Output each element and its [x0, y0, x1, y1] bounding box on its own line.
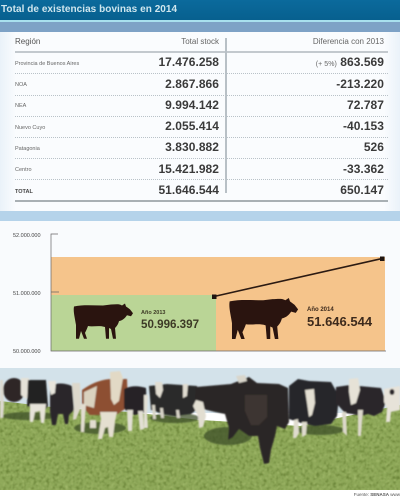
big dark cow centre [193, 375, 289, 464]
row: Provincia de Buenos Aires [15, 55, 384, 69]
row: NOA: 2.867.866 [165, 77, 219, 91]
title: Total de existencias bovinas en 2014 [1, 4, 177, 15]
axis labels: 51.000.000 [13, 291, 41, 297]
icon: cow 2014 [229, 298, 298, 339]
row: NOA [15, 77, 384, 91]
trend line [212, 256, 384, 299]
row: Nuevo Cuyo [15, 119, 384, 133]
row: NEA [15, 98, 384, 112]
chart [13, 233, 386, 355]
row: NEA: 9.994.142 [165, 98, 219, 112]
row: total: 650.147 [340, 183, 384, 197]
row: NOA: -213.220 [336, 77, 384, 91]
row: Patagonia: 526 [364, 140, 384, 154]
row: Nuevo Cuyo: Nuevo Cuyo [15, 125, 45, 131]
axis labels: 52.000.000 [13, 233, 41, 239]
panel: comparison chart [0, 221, 400, 368]
table header: Diferencia con 2013 [313, 37, 384, 46]
black cow centre-left [124, 386, 148, 431]
row: Patagonia: 3.830.882 [165, 140, 219, 154]
small herd centre-left [149, 382, 199, 419]
photo: herd of cows on pasture [0, 368, 400, 490]
table header: Total stock [181, 37, 219, 46]
row: NOA: NOA [15, 82, 27, 88]
decorative blue band [0, 211, 400, 221]
row: total: 51.646.544 [158, 183, 219, 197]
table header: Región [15, 37, 40, 46]
white cow at right edge [384, 386, 400, 422]
cows [0, 371, 400, 464]
row: Patagonia [15, 140, 384, 154]
source credit: Fuente: SENASA www [354, 492, 400, 497]
label 2014: 51.646.544 [307, 314, 373, 329]
table header [15, 37, 384, 46]
label 2013 [141, 310, 199, 331]
label 2013: 50.996.397 [141, 318, 199, 331]
row: Centro: Centro [15, 167, 32, 173]
black cows right [289, 379, 339, 438]
row: NEA: NEA [15, 103, 26, 109]
row: Provincia de Buenos Aires: 17.476.258 [158, 55, 219, 69]
row: Provincia de Buenos Aires: Provincia de Buenos Aires [15, 61, 79, 67]
axis labels: 50.000.000 [13, 349, 41, 355]
panel: table of stock by region [0, 32, 400, 211]
red and white cow [81, 371, 128, 439]
far left cow [0, 378, 30, 418]
axis labels [13, 233, 41, 355]
sky [0, 368, 400, 413]
third cow [48, 381, 81, 425]
axes [51, 234, 386, 351]
row: total: TOTAL [15, 189, 33, 195]
row: Patagonia: Patagonia [15, 146, 40, 152]
label 2014: Año 2014 [307, 307, 334, 313]
shadows on the grass [2, 412, 344, 445]
decorative band below title [0, 20, 400, 32]
row: Provincia de Buenos Aires: (+ 5%) 863.569 [316, 55, 384, 69]
row: Centro: -33.362 [343, 162, 384, 176]
label 2013: Año 2013 [141, 310, 165, 316]
row: Nuevo Cuyo: 2.055.414 [165, 119, 219, 133]
green area 2013 [51, 295, 216, 351]
row: total [15, 183, 384, 197]
row: NEA: 72.787 [347, 98, 384, 112]
second cow [27, 380, 48, 423]
title bar [0, 0, 400, 20]
black and white cows far right [336, 378, 386, 436]
pasture [0, 398, 400, 490]
row: Centro [15, 162, 384, 176]
icon: cow 2013 [74, 304, 133, 339]
label 2014 [307, 307, 373, 329]
orange area 2014 [51, 257, 385, 351]
row: Nuevo Cuyo: -40.153 [343, 119, 384, 133]
row: Centro: 15.421.982 [158, 162, 219, 176]
